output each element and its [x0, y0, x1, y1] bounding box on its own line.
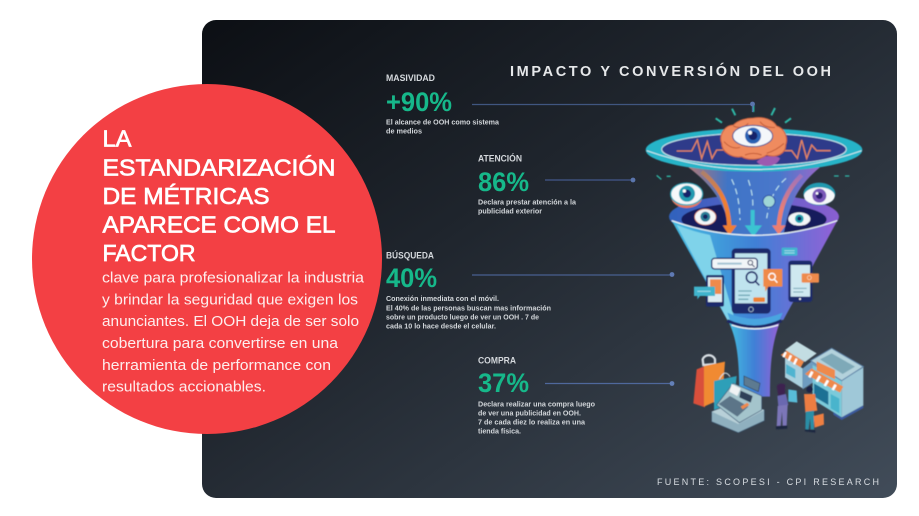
callout heading: ESTANDARIZACIÓN	[102, 154, 336, 180]
panel: dark infographic background	[202, 20, 897, 498]
stat: busqueda: cada 10 lo hace desde el celular.	[386, 322, 496, 330]
floating bubble	[763, 195, 775, 207]
icon: left phone	[706, 275, 724, 307]
icon: teal small message	[782, 248, 797, 256]
top funnel dish	[646, 128, 862, 172]
red circle	[32, 84, 382, 434]
panel: red circle callout	[32, 84, 382, 434]
icon: inner right eye	[788, 212, 810, 226]
icon: orange search card	[763, 269, 782, 292]
stat: masividad: MASIVIDAD	[386, 73, 435, 83]
falling flow arrows	[702, 172, 802, 237]
icon: brain with eye	[721, 117, 787, 166]
funnel stem	[729, 323, 779, 397]
icon: shopping bags	[693, 355, 737, 410]
callout body	[102, 270, 365, 396]
callout heading: LA	[102, 126, 132, 152]
stat: atencion: Declara prestar atención a la	[478, 198, 577, 206]
line: masividad	[472, 102, 755, 112]
callout heading: DE MÉTRICAS	[102, 183, 270, 209]
stat: compra	[478, 356, 595, 436]
icon: man shopper	[804, 386, 824, 433]
funnel neck band	[727, 313, 783, 329]
connector lines	[472, 102, 755, 386]
icon: left large eye	[671, 183, 703, 208]
callout body: anunciantes. El OOH deja de ser solo	[102, 313, 359, 330]
line: compra	[545, 381, 674, 386]
callout body: y brindar la seguridad que exigen los	[102, 292, 358, 308]
stat: busqueda: El 40% de las personas buscan mas información	[386, 304, 551, 312]
stat: masividad: +90%	[386, 87, 452, 117]
stat: compra: de ver una publicidad en OOH.	[478, 408, 581, 418]
stat: masividad: de medios	[386, 126, 422, 136]
upper funnel throat	[688, 167, 820, 237]
funnel cone	[672, 221, 837, 320]
icon: radiating ticks	[657, 104, 849, 179]
shopping scene	[693, 341, 863, 433]
icon: small shop	[781, 341, 817, 389]
stat: compra: 7 de cada diez lo realiza en una	[478, 418, 586, 426]
lower funnel rim	[669, 195, 839, 239]
stat: compra: tienda física.	[478, 426, 521, 436]
stat: compra: 37%	[478, 368, 529, 398]
icon: centre tablet	[732, 248, 771, 314]
panel text	[386, 62, 879, 487]
line: atencion	[545, 178, 635, 182]
title: IMPACTO Y CONVERSIÓN DEL OOH	[510, 62, 831, 80]
icon: right phone	[788, 261, 812, 302]
stat: atencion: publicidad exterior	[478, 206, 542, 216]
callout heading: APARECE COMO EL	[102, 212, 336, 238]
funnel illustration	[646, 104, 863, 433]
icon: large shop	[805, 348, 863, 420]
stat: compra: Declara realizar una compra luego	[478, 400, 595, 408]
source footer: FUENTE: SCOPESI - CPI RESEARCH	[657, 477, 879, 487]
icon: cash register	[712, 376, 764, 433]
icon: orange tag	[802, 273, 819, 283]
callout body: resultados accionables.	[102, 378, 266, 396]
icon: inner left eye	[695, 209, 716, 225]
stat: compra: COMPRA	[478, 356, 516, 366]
stat: atencion	[478, 152, 577, 216]
stat: busqueda: BÚSQUEDA	[386, 250, 434, 260]
callout body: cobertura para convertirse en una	[102, 335, 339, 352]
icon: teal chat bubble	[694, 287, 715, 299]
brainwave lines	[677, 140, 831, 158]
icon: right large eye	[803, 183, 835, 205]
stat: busqueda: Conexión inmediata con el móvil.	[386, 294, 499, 303]
stat: busqueda: 40%	[386, 263, 437, 293]
stat: atencion: ATENCIÓN	[478, 152, 522, 164]
stat: masividad	[386, 73, 500, 136]
callout heading	[102, 126, 336, 266]
icon: search bar	[712, 258, 757, 269]
callout body: herramienta de performance con	[102, 357, 331, 374]
callout heading: FACTOR	[102, 240, 196, 266]
stat: busqueda	[386, 250, 551, 330]
stat: busqueda: sobre un producto luego de ver un OOH . 7 de	[386, 312, 539, 322]
line: busqueda	[472, 272, 674, 277]
callout body: clave para profesionalizar la industria	[102, 270, 365, 286]
stat: atencion: 86%	[478, 167, 529, 197]
icon: woman shopper	[776, 384, 797, 429]
stat: masividad: El alcance de OOH como sistema	[386, 118, 500, 126]
